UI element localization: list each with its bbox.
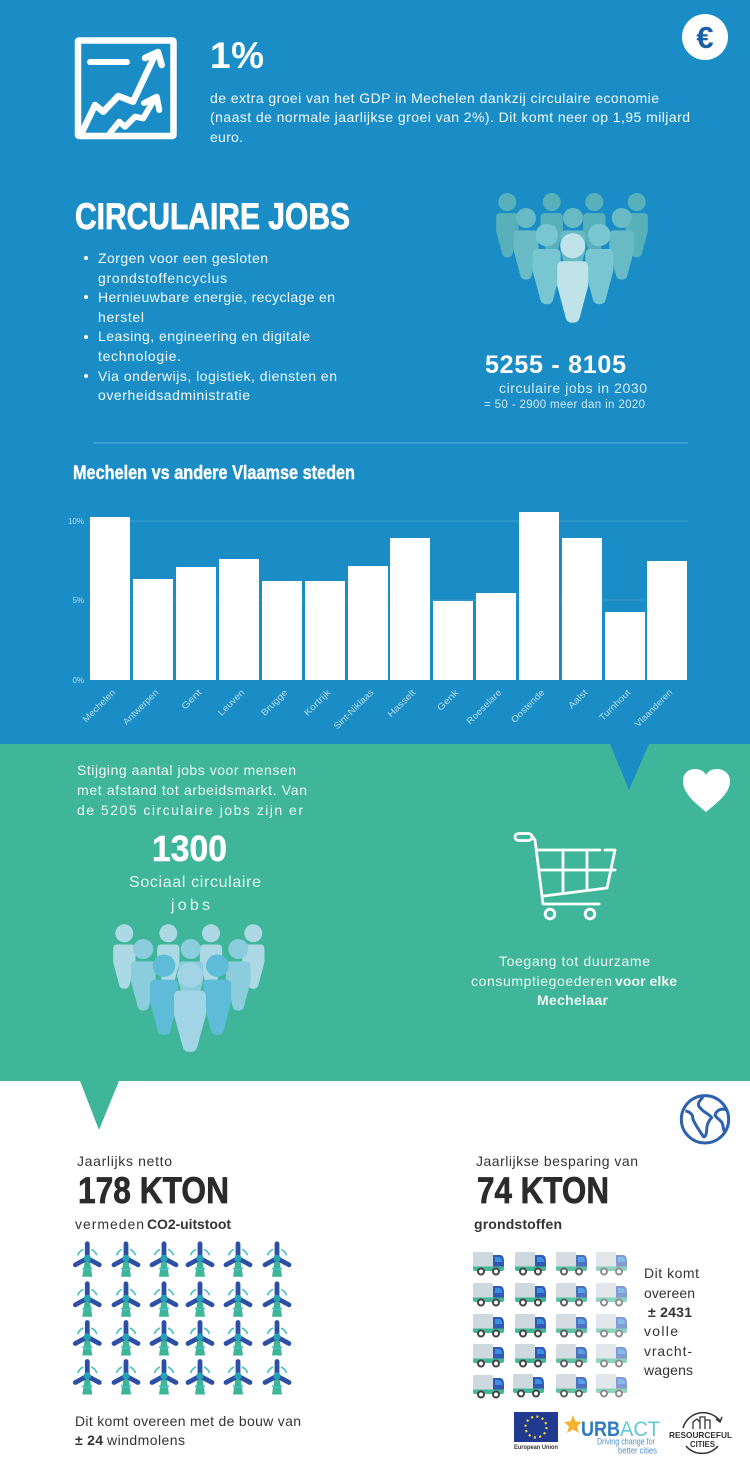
stat: 1300 social circular jobs: Sociaal circulaire — [129, 874, 261, 891]
heading: 1 percent: 1% — [210, 35, 264, 76]
stat: circular jobs 2030: circulaire jobs in 2030 — [499, 380, 647, 396]
bar chart: Mechelen vs Flemish cities: Roeselare — [465, 687, 503, 726]
bar chart: Mechelen vs Flemish cities: 0% — [72, 676, 84, 685]
bar chart: Mechelen vs Flemish cities: Vlaanderen — [633, 687, 674, 729]
bar chart: Mechelen vs Flemish cities: 10% — [68, 517, 84, 526]
stat: raw materials saved: grondstoffen — [474, 1216, 562, 1232]
icon: shopping cart — [515, 834, 615, 919]
stat: 1300 social circular jobs: jobs — [170, 897, 210, 914]
text: trucks comparison: overeen — [644, 1285, 695, 1301]
stat: raw materials saved: Jaarlijkse besparing van — [476, 1153, 638, 1169]
heading: chart title: Mechelen vs andere Vlaamse steden — [73, 463, 355, 484]
list: circular job characteristics: technologie. — [98, 348, 181, 364]
logo: Resourceful Cities: CITIES — [690, 1439, 715, 1449]
stat: circular jobs 2030 — [484, 351, 647, 411]
list: circular job characteristics: Leasing, engineering en digitale — [98, 328, 310, 344]
bar chart: Mechelen vs Flemish cities: Turnhout — [597, 687, 633, 723]
text: GDP growth: de extra groei van het GDP in Mechelen dankzij circulaire economie — [210, 90, 659, 106]
list: circular job characteristics: overheidsadministratie — [98, 387, 250, 403]
icon grid: trucks — [473, 1252, 627, 1398]
text: access to sustainable goods: voor elke — [615, 973, 677, 989]
text: windmills comparison: Dit komt overeen met de bouw van — [75, 1413, 301, 1429]
text: windmills comparison — [75, 1413, 301, 1448]
stat: raw materials saved — [474, 1153, 638, 1232]
bar chart: Mechelen vs Flemish cities: Brugge — [259, 687, 289, 718]
stat: CO2 avoided: Jaarlijks netto — [77, 1153, 172, 1169]
stat: CO2 avoided — [75, 1153, 231, 1232]
icon: globe — [681, 1096, 729, 1143]
text: social jobs intro: de 5205 circulaire jobs zijn er — [77, 802, 303, 818]
icon: group of people (green section) — [113, 924, 264, 1052]
icon: euro badge: € — [696, 20, 714, 55]
text: trucks comparison: Dit komt — [644, 1265, 699, 1281]
logo: Resourceful Cities — [669, 1413, 732, 1453]
icon: growth chart — [78, 40, 174, 136]
list: circular job characteristics: herstel — [98, 309, 144, 325]
logo: European Union — [514, 1412, 558, 1451]
panel: green social section — [0, 744, 750, 1081]
stat: CO2 avoided: vermeden — [75, 1216, 144, 1232]
bar chart: Mechelen vs Flemish cities: Hasselt — [386, 687, 418, 719]
bar chart: Mechelen vs Flemish cities: Aalst — [566, 687, 590, 711]
bar chart: Mechelen vs Flemish cities: Sint-Niklaas — [332, 687, 376, 731]
heading: circulaire jobs: CIRCULAIRE JOBS — [75, 196, 350, 237]
icon: euro badge — [682, 14, 728, 60]
panel: blue economy and jobs section — [0, 0, 750, 744]
text: GDP growth: euro. — [210, 129, 243, 145]
text: trucks comparison: vracht- — [644, 1343, 692, 1359]
bar chart: Mechelen vs Flemish cities: Kortrijk — [302, 687, 333, 718]
stat: 1300 social circular jobs: 1300 — [152, 828, 227, 869]
text: access to sustainable goods — [471, 953, 677, 1008]
logo: URBACT: URB — [581, 1418, 620, 1441]
logo: Resourceful Cities: RESOURCEFUL — [669, 1430, 732, 1440]
text: GDP growth — [210, 90, 690, 145]
list: circular job characteristics: grondstoffencyclus — [98, 270, 227, 286]
stat: circular jobs 2030: = 50 - 2900 meer dan in 2020 — [484, 399, 645, 411]
text: windmills comparison: windmolens — [106, 1432, 185, 1448]
text: trucks comparison: wagens — [643, 1362, 693, 1378]
list: circular job characteristics: Hernieuwbare energie, recyclage en — [98, 289, 335, 305]
text: trucks comparison — [643, 1265, 699, 1378]
text: windmills comparison: ± 24 — [75, 1432, 103, 1448]
stat: CO2 avoided: 178 KTON — [78, 1170, 229, 1211]
bar chart: Mechelen vs Flemish cities: Genk — [435, 687, 461, 713]
stat: 1300 social circular jobs — [129, 828, 261, 914]
text: access to sustainable goods: Mechelaar — [537, 992, 609, 1008]
text: social jobs intro: met afstand tot arbeidsmarkt. Van — [77, 782, 307, 798]
list: circular job characteristics: Zorgen voor een gesloten — [98, 250, 268, 266]
logo: European Union: European Union — [514, 1445, 558, 1451]
text: access to sustainable goods: consumptiegoederen — [471, 973, 612, 989]
callout pointer: green — [80, 1081, 119, 1130]
text: GDP growth: (naast de normale jaarlijkse groei van 2%). Dit komt neer op 1,95 miljard — [210, 109, 690, 125]
text: trucks comparison: ± 2431 — [648, 1304, 692, 1320]
bar chart: Mechelen vs Flemish cities: Oostende — [509, 687, 546, 725]
logo: URBACT — [564, 1415, 660, 1456]
logo: URBACT: Driving change for — [597, 1436, 655, 1446]
icon: heart — [683, 769, 730, 812]
text: trucks comparison: volle — [644, 1323, 678, 1339]
icon grid: windmills — [75, 1244, 289, 1394]
text: social jobs intro — [77, 762, 307, 818]
bar chart: Mechelen vs Flemish cities: 5% — [72, 596, 84, 605]
callout pointer: blue — [610, 744, 649, 790]
list: circular job characteristics: Via onderwijs, logistiek, diensten en — [98, 368, 337, 384]
list: circular job characteristics — [84, 250, 337, 403]
text: social jobs intro: Stijging aantal jobs voor mensen — [77, 762, 296, 778]
logo: URBACT: ACT — [620, 1418, 660, 1441]
stat: CO2 avoided: CO2-uitstoot — [147, 1216, 231, 1232]
bar chart: Mechelen vs Flemish cities: Leuven — [216, 687, 246, 718]
text: access to sustainable goods: Toegang tot duurzame — [499, 953, 650, 969]
stat: circular jobs 2030: 5255 - 8105 — [485, 351, 626, 379]
bar chart: Mechelen vs Flemish cities: Antwerpen — [121, 687, 160, 727]
bar chart: Mechelen vs Flemish cities: Gent — [179, 687, 204, 711]
icon: group of people (blue section) — [496, 193, 648, 323]
logo: URBACT: better cities — [618, 1446, 657, 1456]
bar chart: Mechelen vs Flemish cities: Mechelen — [81, 687, 117, 724]
stat: raw materials saved: 74 KTON — [477, 1170, 609, 1211]
bar chart: Mechelen vs Flemish cities — [68, 512, 688, 731]
